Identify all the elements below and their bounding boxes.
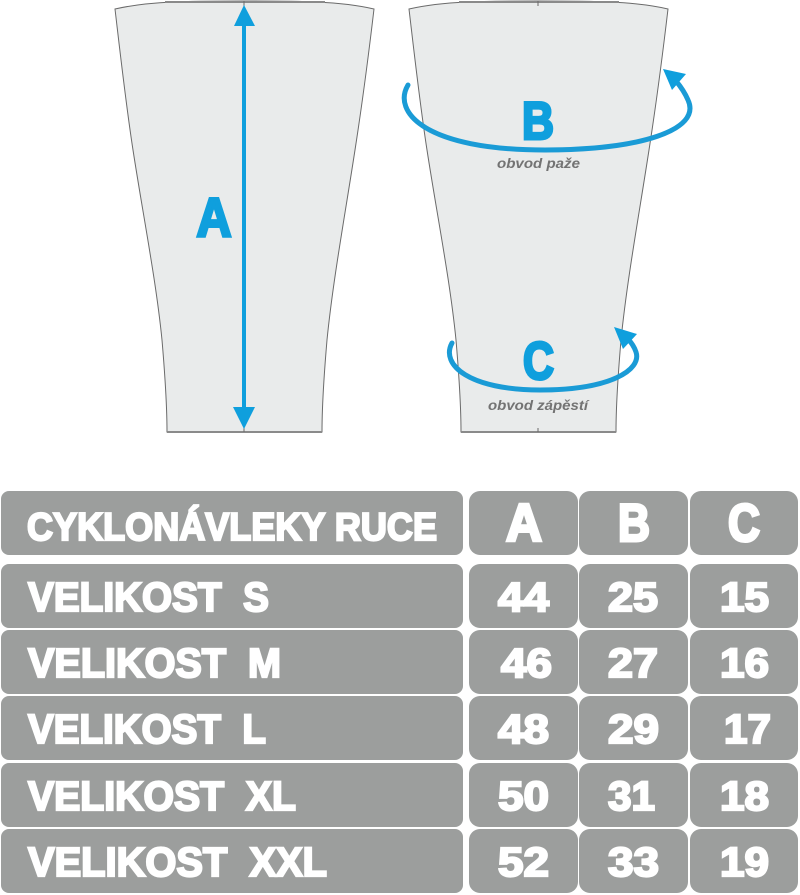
row: size XL: 31 xyxy=(608,773,655,819)
header row: B xyxy=(618,494,650,553)
row: size XXL: 33 xyxy=(608,839,659,885)
row: size L: 17 xyxy=(724,706,771,752)
header row: C xyxy=(728,494,760,553)
row: size XXL xyxy=(1,829,798,893)
arrow: length A xyxy=(233,5,255,429)
size table xyxy=(1,491,798,893)
row: size XXL: 19 xyxy=(720,839,769,885)
row: size L: VELIKOST L xyxy=(28,706,266,752)
row: size XXL: VELIKOST XXL xyxy=(28,839,327,885)
sleeve outline right xyxy=(409,1,668,432)
label: C: C xyxy=(523,332,554,391)
row: size XXL: 52 xyxy=(498,839,549,885)
row: size L: 29 xyxy=(608,706,659,752)
row: size XL: VELIKOST XL xyxy=(28,773,296,819)
panel: sleeve with circumference measures B and C xyxy=(404,1,690,432)
row: size M: 46 xyxy=(501,640,552,686)
label: A: A xyxy=(196,186,232,248)
row: size XL: 18 xyxy=(720,773,769,819)
panel: sleeve with length measure A xyxy=(115,1,374,432)
row: size M xyxy=(1,630,798,694)
caption: obvod paže: obvod paže xyxy=(497,155,580,171)
arrow: arm circumference B xyxy=(404,69,690,150)
header row: A xyxy=(506,494,542,553)
header row: CYKLONÁVLEKY RUCE xyxy=(27,505,437,549)
row: size S xyxy=(1,564,798,628)
row: size L: 48 xyxy=(498,706,549,752)
row: size XL xyxy=(1,763,798,827)
header row xyxy=(1,491,798,555)
row: size L xyxy=(1,696,798,760)
caption: obvod zápěstí: obvod zápěstí xyxy=(488,397,590,413)
row: size S: 44 xyxy=(498,574,549,620)
row: size XL: 50 xyxy=(498,773,549,819)
row: size M: 16 xyxy=(720,640,769,686)
row: size S: 25 xyxy=(608,574,658,620)
row: size S: VELIKOST S xyxy=(28,574,269,620)
sleeve outline left xyxy=(115,1,374,432)
row: size M: 27 xyxy=(608,640,658,686)
label: B: B xyxy=(522,92,554,151)
arrow: wrist circumference C xyxy=(449,327,637,390)
row: size M: VELIKOST M xyxy=(28,640,281,686)
row: size S: 15 xyxy=(720,574,769,620)
